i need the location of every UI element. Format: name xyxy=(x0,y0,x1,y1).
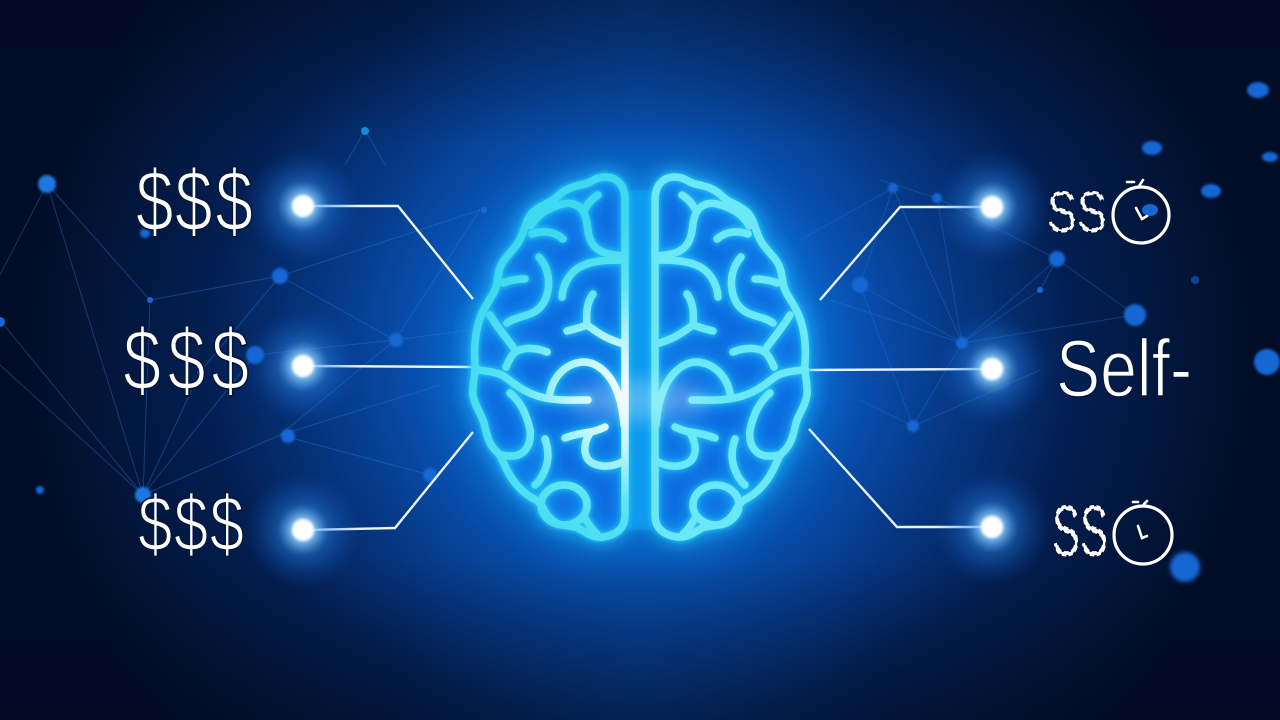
node: middle right xyxy=(934,311,1050,427)
icon: neon brain xyxy=(473,177,807,537)
connector: top right xyxy=(820,207,992,300)
connector: middle right xyxy=(806,369,992,370)
connector lines xyxy=(303,206,992,530)
label: garbled dollars top right: SS xyxy=(1047,180,1107,245)
node: middle left xyxy=(245,308,361,424)
brain interior fill xyxy=(473,177,807,537)
label: dollars middle left: $$$ xyxy=(123,311,249,409)
label: dollars bottom left: $$$ xyxy=(138,481,244,569)
label: garbled dollars bottom right: SS xyxy=(1052,492,1108,572)
node: top left xyxy=(245,148,361,264)
icon: stopwatch bottom right xyxy=(1114,501,1172,564)
label: Self-: Self- xyxy=(1056,324,1192,414)
connector: bottom left xyxy=(303,432,473,530)
background network: right side xyxy=(800,82,1280,582)
brain outer glow xyxy=(473,177,807,537)
central light glow over the brain midline xyxy=(570,380,710,420)
node: top right xyxy=(934,149,1050,265)
background network: left side xyxy=(0,127,487,503)
icon: stopwatch top right xyxy=(1113,180,1169,243)
connector: bottom right xyxy=(809,429,992,527)
node: bottom left xyxy=(245,472,361,588)
label: dollars top left: $$$ xyxy=(136,152,253,250)
glowing nodes xyxy=(245,148,1050,588)
connector: top left xyxy=(303,206,473,299)
connector: middle left xyxy=(303,366,474,367)
node: bottom right xyxy=(934,469,1050,585)
bright column between hemispheres xyxy=(627,190,653,530)
